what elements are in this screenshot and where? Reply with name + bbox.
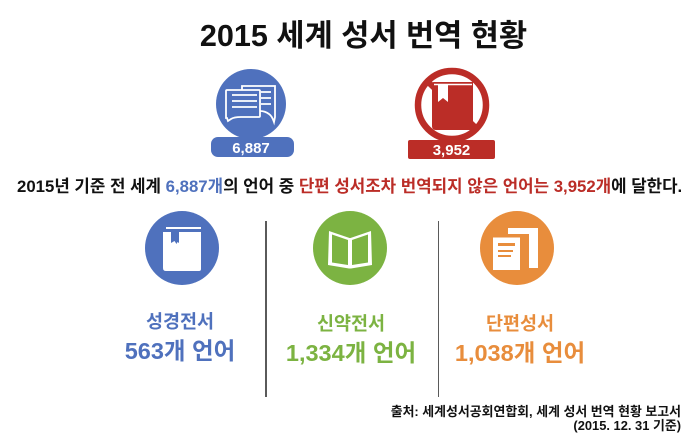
source note: 출처: 세계성서공회연합회, 세계 성서 번역 현황 보고서 [391,404,681,419]
stat: new testament: 1,334개 언어 [286,340,416,366]
stat: new testament [286,313,416,366]
stat: book portions: 단편성서 [486,313,554,334]
icon: book portions documents [480,211,554,285]
stat: complete bible: 성경전서 [146,311,214,332]
stat: book portions [455,313,585,366]
icon: speech bubbles with 6,887 badge [211,69,294,157]
stat: complete bible: 563개 언어 [125,338,235,364]
divider left [265,221,267,397]
stat: new testament: 신약전서 [317,313,385,334]
icon: complete bible [145,211,219,285]
source note [391,404,681,433]
icon: new testament open book [313,211,387,285]
badge value: 6,887: 6,887 [232,140,270,157]
divider right [438,221,439,397]
title: 2015 세계 성서 번역 현황 [200,19,527,53]
icon: crossed book with 3,952 badge [408,71,495,159]
summary sentence: 2015년 기준 전 세계 6,887개의 언어 중 단편 성서조차 번역되지 않은 언어는 3,952개에 달한다. [17,176,682,196]
stat: complete bible [125,311,235,364]
source note: (2015. 12. 31 기준) [573,418,681,433]
stat: book portions: 1,038개 언어 [455,340,585,366]
badge value: 3,952: 3,952 [433,142,470,159]
